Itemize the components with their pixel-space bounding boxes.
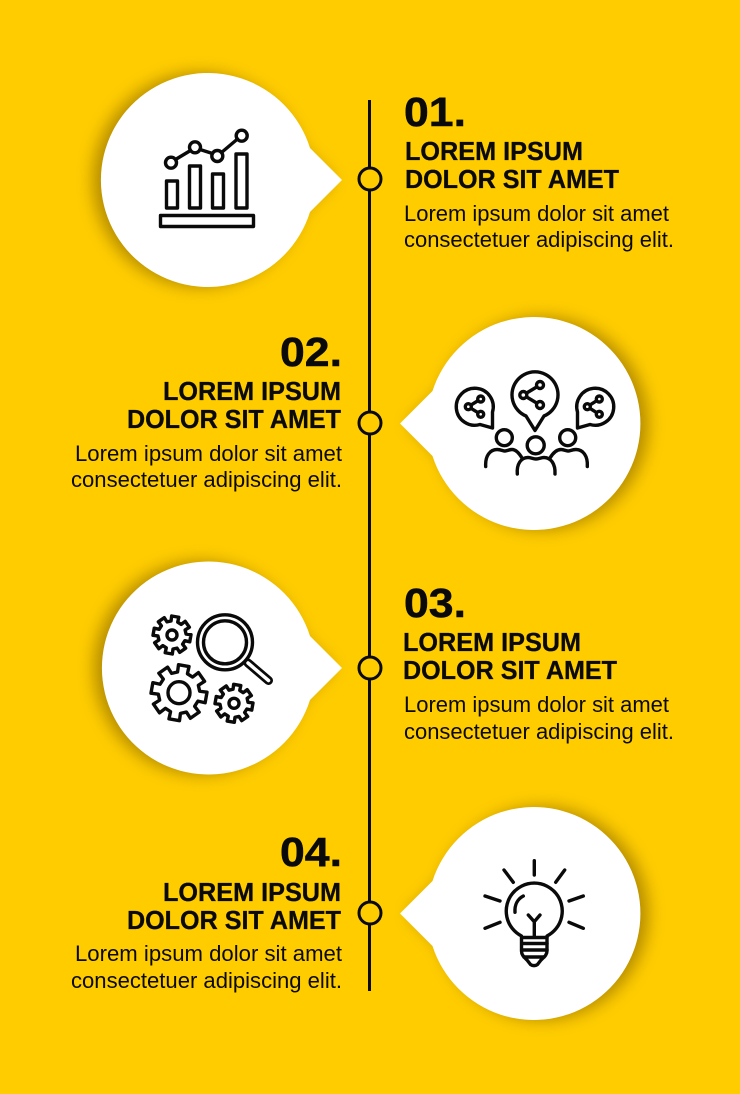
panel: step 2 text: DOLOR SIT AMET bbox=[127, 406, 341, 434]
panel: step 3 text: LOREM IPSUM bbox=[403, 629, 581, 657]
panel: step 1 text: DOLOR SIT AMET bbox=[405, 166, 619, 194]
panel: step 1 text: 01. bbox=[404, 89, 466, 135]
panel: step 2 text: Lorem ipsum dolor sit amet bbox=[75, 441, 342, 466]
panel: step 1 text: consectetuer adipiscing elit. bbox=[404, 227, 674, 252]
panel: step 4 text: Lorem ipsum dolor sit amet bbox=[75, 941, 342, 966]
icon: light bulb bbox=[485, 861, 583, 966]
panel: step 1 text bbox=[404, 89, 674, 252]
timeline with nodes bbox=[359, 100, 381, 991]
panel: step 2 bubble bbox=[400, 317, 648, 530]
panel: step 2 text: consectetuer adipiscing elit. bbox=[71, 467, 342, 492]
panel: step 4 text: LOREM IPSUM bbox=[163, 879, 341, 907]
panel: step 3 text: consectetuer adipiscing elit. bbox=[404, 719, 674, 744]
panel: step 2 text: 02. bbox=[280, 329, 342, 375]
panel: step 4 text: DOLOR SIT AMET bbox=[127, 907, 341, 935]
panel: step 2 text: LOREM IPSUM bbox=[163, 378, 341, 406]
panel: step 3 text: Lorem ipsum dolor sit amet bbox=[404, 692, 669, 717]
icon: people sharing bbox=[456, 372, 614, 474]
panel: step 1 text: Lorem ipsum dolor sit amet bbox=[404, 201, 669, 226]
panel: step 3 text: 03. bbox=[404, 580, 466, 626]
panel: step 1 bubble bbox=[93, 73, 342, 287]
panel: step 1 text: LOREM IPSUM bbox=[405, 138, 583, 166]
panel: step 3 text bbox=[403, 580, 674, 744]
panel: step 3 bubble bbox=[94, 562, 342, 774]
panel: step 2 text bbox=[71, 329, 342, 492]
icon: gears and magnifying glass bbox=[147, 613, 268, 725]
panel: step 4 text: consectetuer adipiscing elit. bbox=[71, 968, 342, 993]
panel: step 4 text bbox=[71, 829, 342, 993]
panel: step 4 bubble bbox=[400, 807, 648, 1020]
panel: step 4 text: 04. bbox=[280, 829, 342, 875]
icon: bar chart with trend line bbox=[160, 130, 254, 226]
panel: step 3 text: DOLOR SIT AMET bbox=[403, 657, 617, 685]
